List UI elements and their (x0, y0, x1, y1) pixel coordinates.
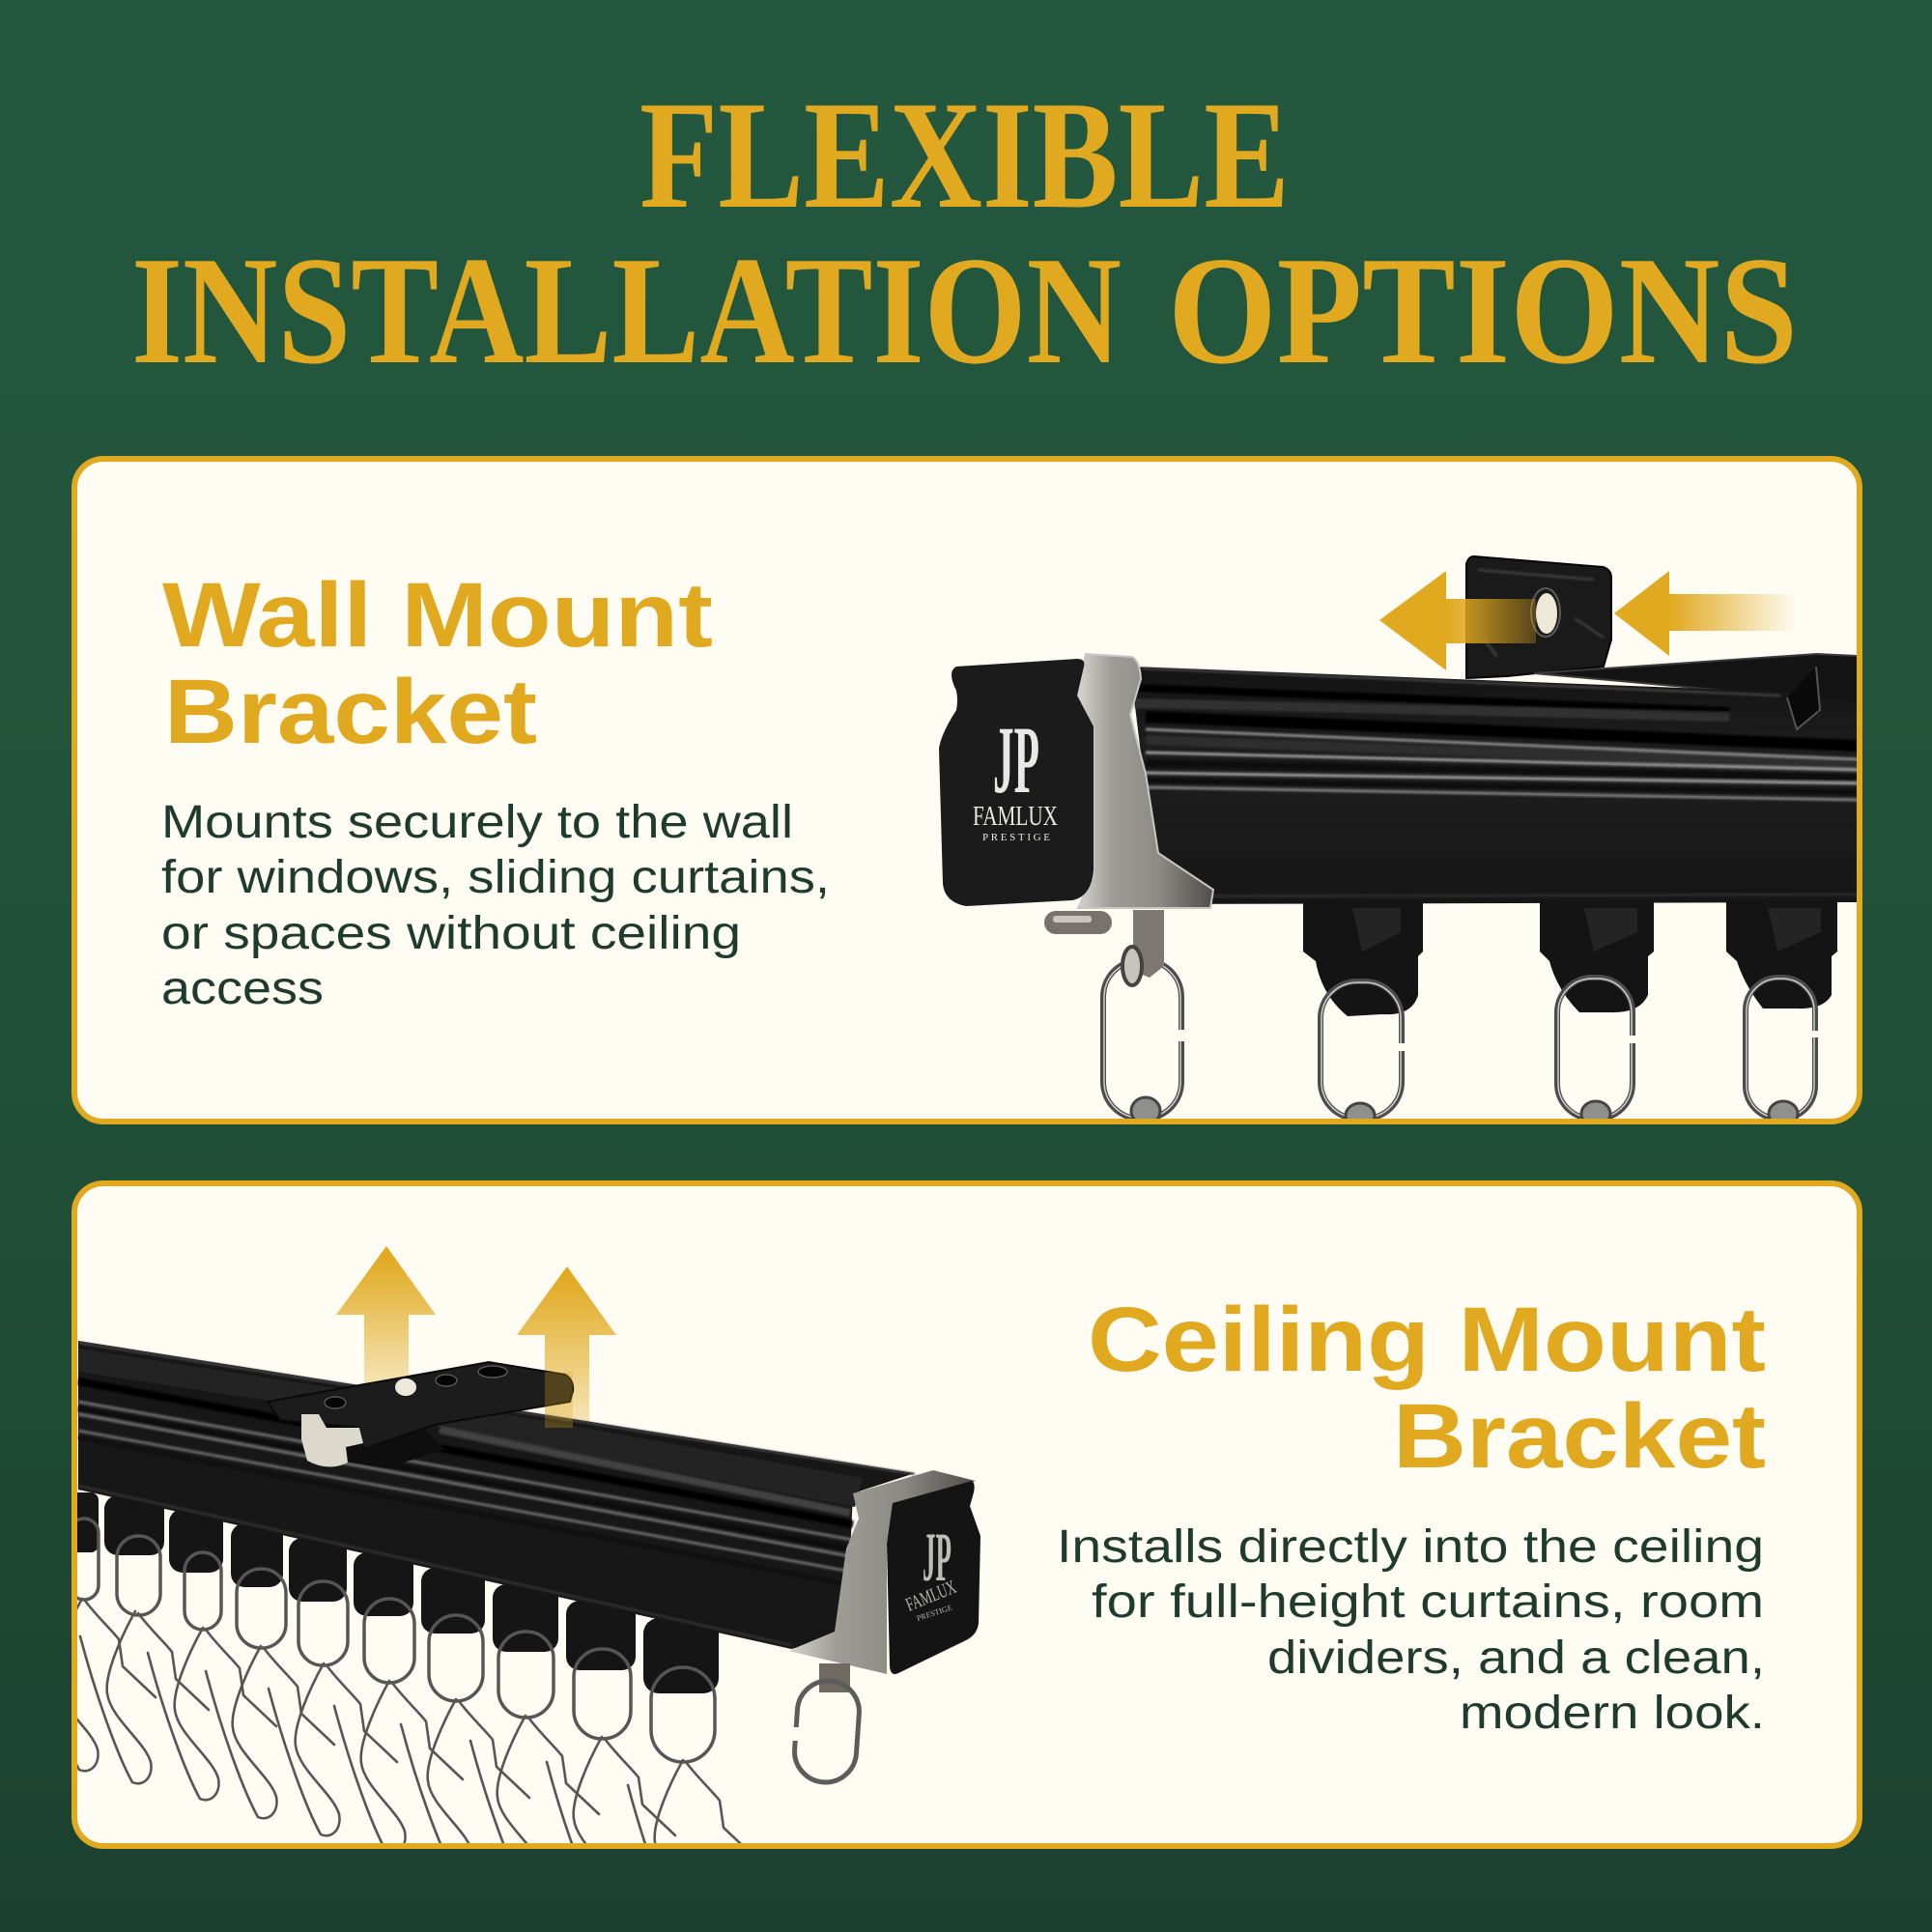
title: INSTALLATION (131, 224, 1122, 396)
curtain hooks (77, 1598, 742, 1843)
silver end cap (1077, 654, 1213, 908)
end ring with tab (790, 1663, 862, 1784)
product: ceiling-mounted curtain track: JP (923, 1519, 952, 1596)
heading: ceiling mount: Bracket (1393, 1385, 1766, 1488)
plate holes (325, 1366, 507, 1408)
heading: ceiling mount (1088, 1289, 1766, 1488)
ring 1 (1321, 981, 1402, 1119)
title: OPTIONS (1168, 224, 1798, 396)
panel background (74, 459, 1860, 1122)
glider 3 (1726, 900, 1837, 1009)
text block: wall mount description: for windows, sliding curtains, (161, 852, 830, 903)
text block: wall mount description: access (161, 963, 324, 1014)
arrow: left arrow over bracket (1379, 571, 1536, 670)
rings (70, 1519, 715, 1762)
gliders (64, 1492, 719, 1693)
product: wall-mounted curtain track (939, 556, 1858, 1128)
ring gaps (1179, 1030, 1184, 1041)
brand logo on end plate: PRESTIGE (916, 1604, 953, 1623)
rear channel (1534, 653, 1857, 703)
black end plate (939, 659, 1094, 906)
rail body (78, 1341, 915, 1649)
translucent arrow overlay on plate (545, 1372, 573, 1428)
wall bracket plate with hole (1466, 556, 1611, 678)
end ring (1103, 960, 1181, 1119)
ring 3 (1746, 978, 1815, 1119)
ring 2 (1557, 978, 1633, 1119)
text block: wall mount description: Mounts securely to the wall (161, 797, 793, 848)
heading: ceiling mount: Ceiling Mount (1088, 1289, 1766, 1391)
chain links (1130, 1095, 1799, 1119)
end bolt and tab (1044, 910, 1164, 985)
rail body (1130, 667, 1858, 904)
text block: ceiling mount description: dividers, and a clean, (1267, 1633, 1765, 1684)
heading: wall mount (162, 564, 713, 763)
text block: wall mount description (161, 797, 830, 1014)
brand logo on end plate: PRESTIGE (982, 832, 1050, 843)
black end plate (887, 1481, 980, 1674)
arrow: right arrow fading out (1614, 571, 1792, 656)
ceiling mount plate (268, 1362, 573, 1468)
panel background (74, 1183, 1860, 1846)
text block: ceiling mount description (1057, 1521, 1765, 1739)
product: ceiling-mounted curtain track (77, 1246, 980, 1843)
brand logo on end plate: FAMLUX (973, 801, 1058, 832)
plastic glider (301, 1414, 363, 1467)
text block: ceiling mount description: Installs directly into the ceiling (1057, 1521, 1764, 1573)
title (131, 69, 1798, 396)
text block: ceiling mount description: modern look. (1460, 1688, 1765, 1739)
panel: wall mount bracket (74, 459, 1860, 1128)
text block: ceiling mount description: for full-height curtains, room (1092, 1577, 1764, 1628)
white peg (395, 1378, 416, 1396)
gliders and rings (1103, 900, 1837, 1128)
brand logo on end plate (974, 728, 1058, 840)
title: FLEXIBLE (639, 69, 1290, 241)
silver end cap (788, 1470, 976, 1674)
heading: wall mount: Bracket (164, 661, 537, 763)
panel: ceiling mount bracket (71, 1180, 1862, 1849)
text block: wall mount description: or spaces without ceiling (161, 908, 741, 959)
brand logo on end plate: JP (993, 706, 1039, 813)
glider 1 (1303, 900, 1423, 1016)
glider 2 (1540, 900, 1654, 1012)
arrow: upward arrow right (517, 1266, 616, 1430)
brand logo on end plate: FAMLUX (903, 1577, 959, 1616)
arrow: upward arrow behind plate (336, 1246, 436, 1383)
heading: wall mount: Wall Mount (162, 564, 713, 667)
brand logo on end plate (904, 1534, 957, 1621)
